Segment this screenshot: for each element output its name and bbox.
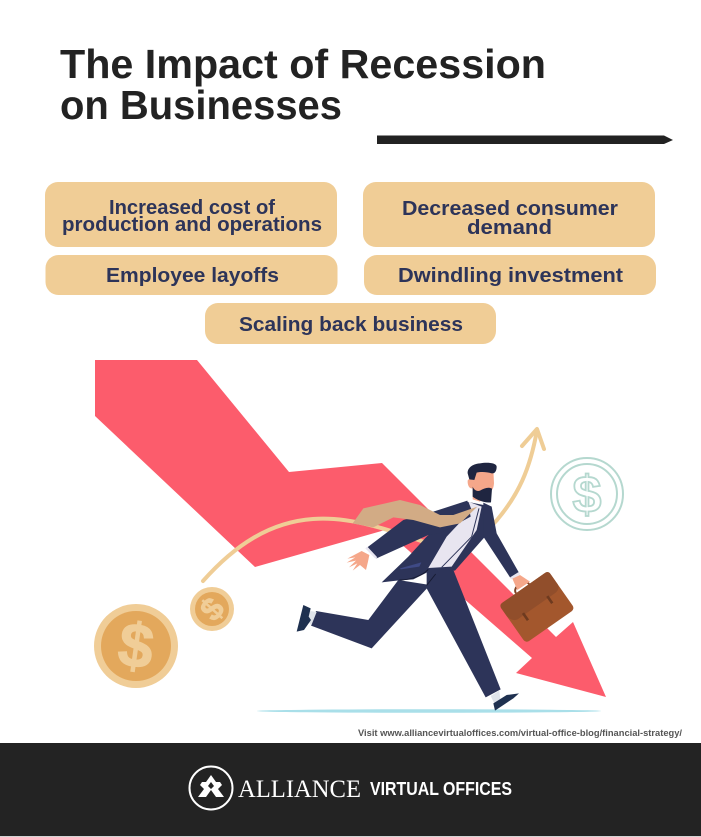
panel: employee layoffs	[46, 255, 338, 295]
jacket	[382, 502, 492, 582]
logo icon	[190, 766, 232, 810]
icon: small dollar coin: $	[193, 590, 231, 628]
left cuff	[365, 547, 377, 559]
right arm	[483, 503, 519, 578]
shirt placket	[442, 508, 479, 567]
back leg	[311, 580, 430, 648]
logo wordmark: ALLIANCE	[238, 776, 361, 803]
source url: Visit www.alliancevirtualoffices.com/virtual-office-blog/financial-strategy/	[358, 728, 682, 739]
ground shadow	[257, 709, 601, 713]
title: The Impact of Recession	[60, 41, 546, 87]
left arm	[366, 501, 471, 558]
logo wordmark	[238, 776, 512, 803]
icon: large dollar coin: $	[114, 610, 158, 683]
red downward arrow	[95, 360, 606, 697]
neck and face	[468, 469, 494, 502]
flying tie	[353, 500, 477, 527]
panel: increased cost: Increased cost of	[109, 196, 275, 219]
footer bottom edge	[0, 836, 701, 837]
pocket	[400, 562, 421, 569]
panel: decreased demand	[363, 182, 655, 247]
footer band	[0, 743, 701, 836]
panel: scaling back: Scaling back business	[239, 313, 463, 336]
icon: outline dollar coin: $	[573, 466, 602, 524]
left hand	[347, 551, 369, 571]
panel: decreased demand: demand	[467, 216, 552, 239]
panel: dwindling investment: Dwindling investment	[398, 264, 623, 287]
icon: large dollar coin	[94, 604, 178, 688]
jacket hem line	[399, 569, 436, 585]
panel: increased cost: production and operations	[62, 213, 322, 236]
title underline arrow	[377, 136, 673, 144]
rising curve arrow	[203, 429, 544, 581]
front shoe	[491, 691, 519, 711]
title: on Businesses	[60, 82, 342, 128]
logo wordmark: VIRTUAL OFFICES	[370, 779, 512, 799]
panel: dwindling investment	[364, 255, 656, 295]
panel: employee layoffs: Employee layoffs	[106, 264, 279, 287]
back shoe	[297, 605, 317, 632]
panel: decreased demand: Decreased consumer	[402, 197, 618, 220]
beard	[473, 487, 492, 503]
panel: scaling back	[205, 303, 496, 344]
hair	[468, 463, 497, 480]
shirt	[428, 502, 482, 568]
title	[60, 41, 546, 128]
briefcase	[496, 566, 575, 643]
panel: increased cost	[45, 182, 337, 247]
icon: outline dollar coin	[551, 458, 623, 530]
front leg	[427, 567, 501, 697]
businessman running	[297, 463, 575, 711]
right cuff	[510, 572, 520, 579]
right hand	[512, 575, 530, 590]
